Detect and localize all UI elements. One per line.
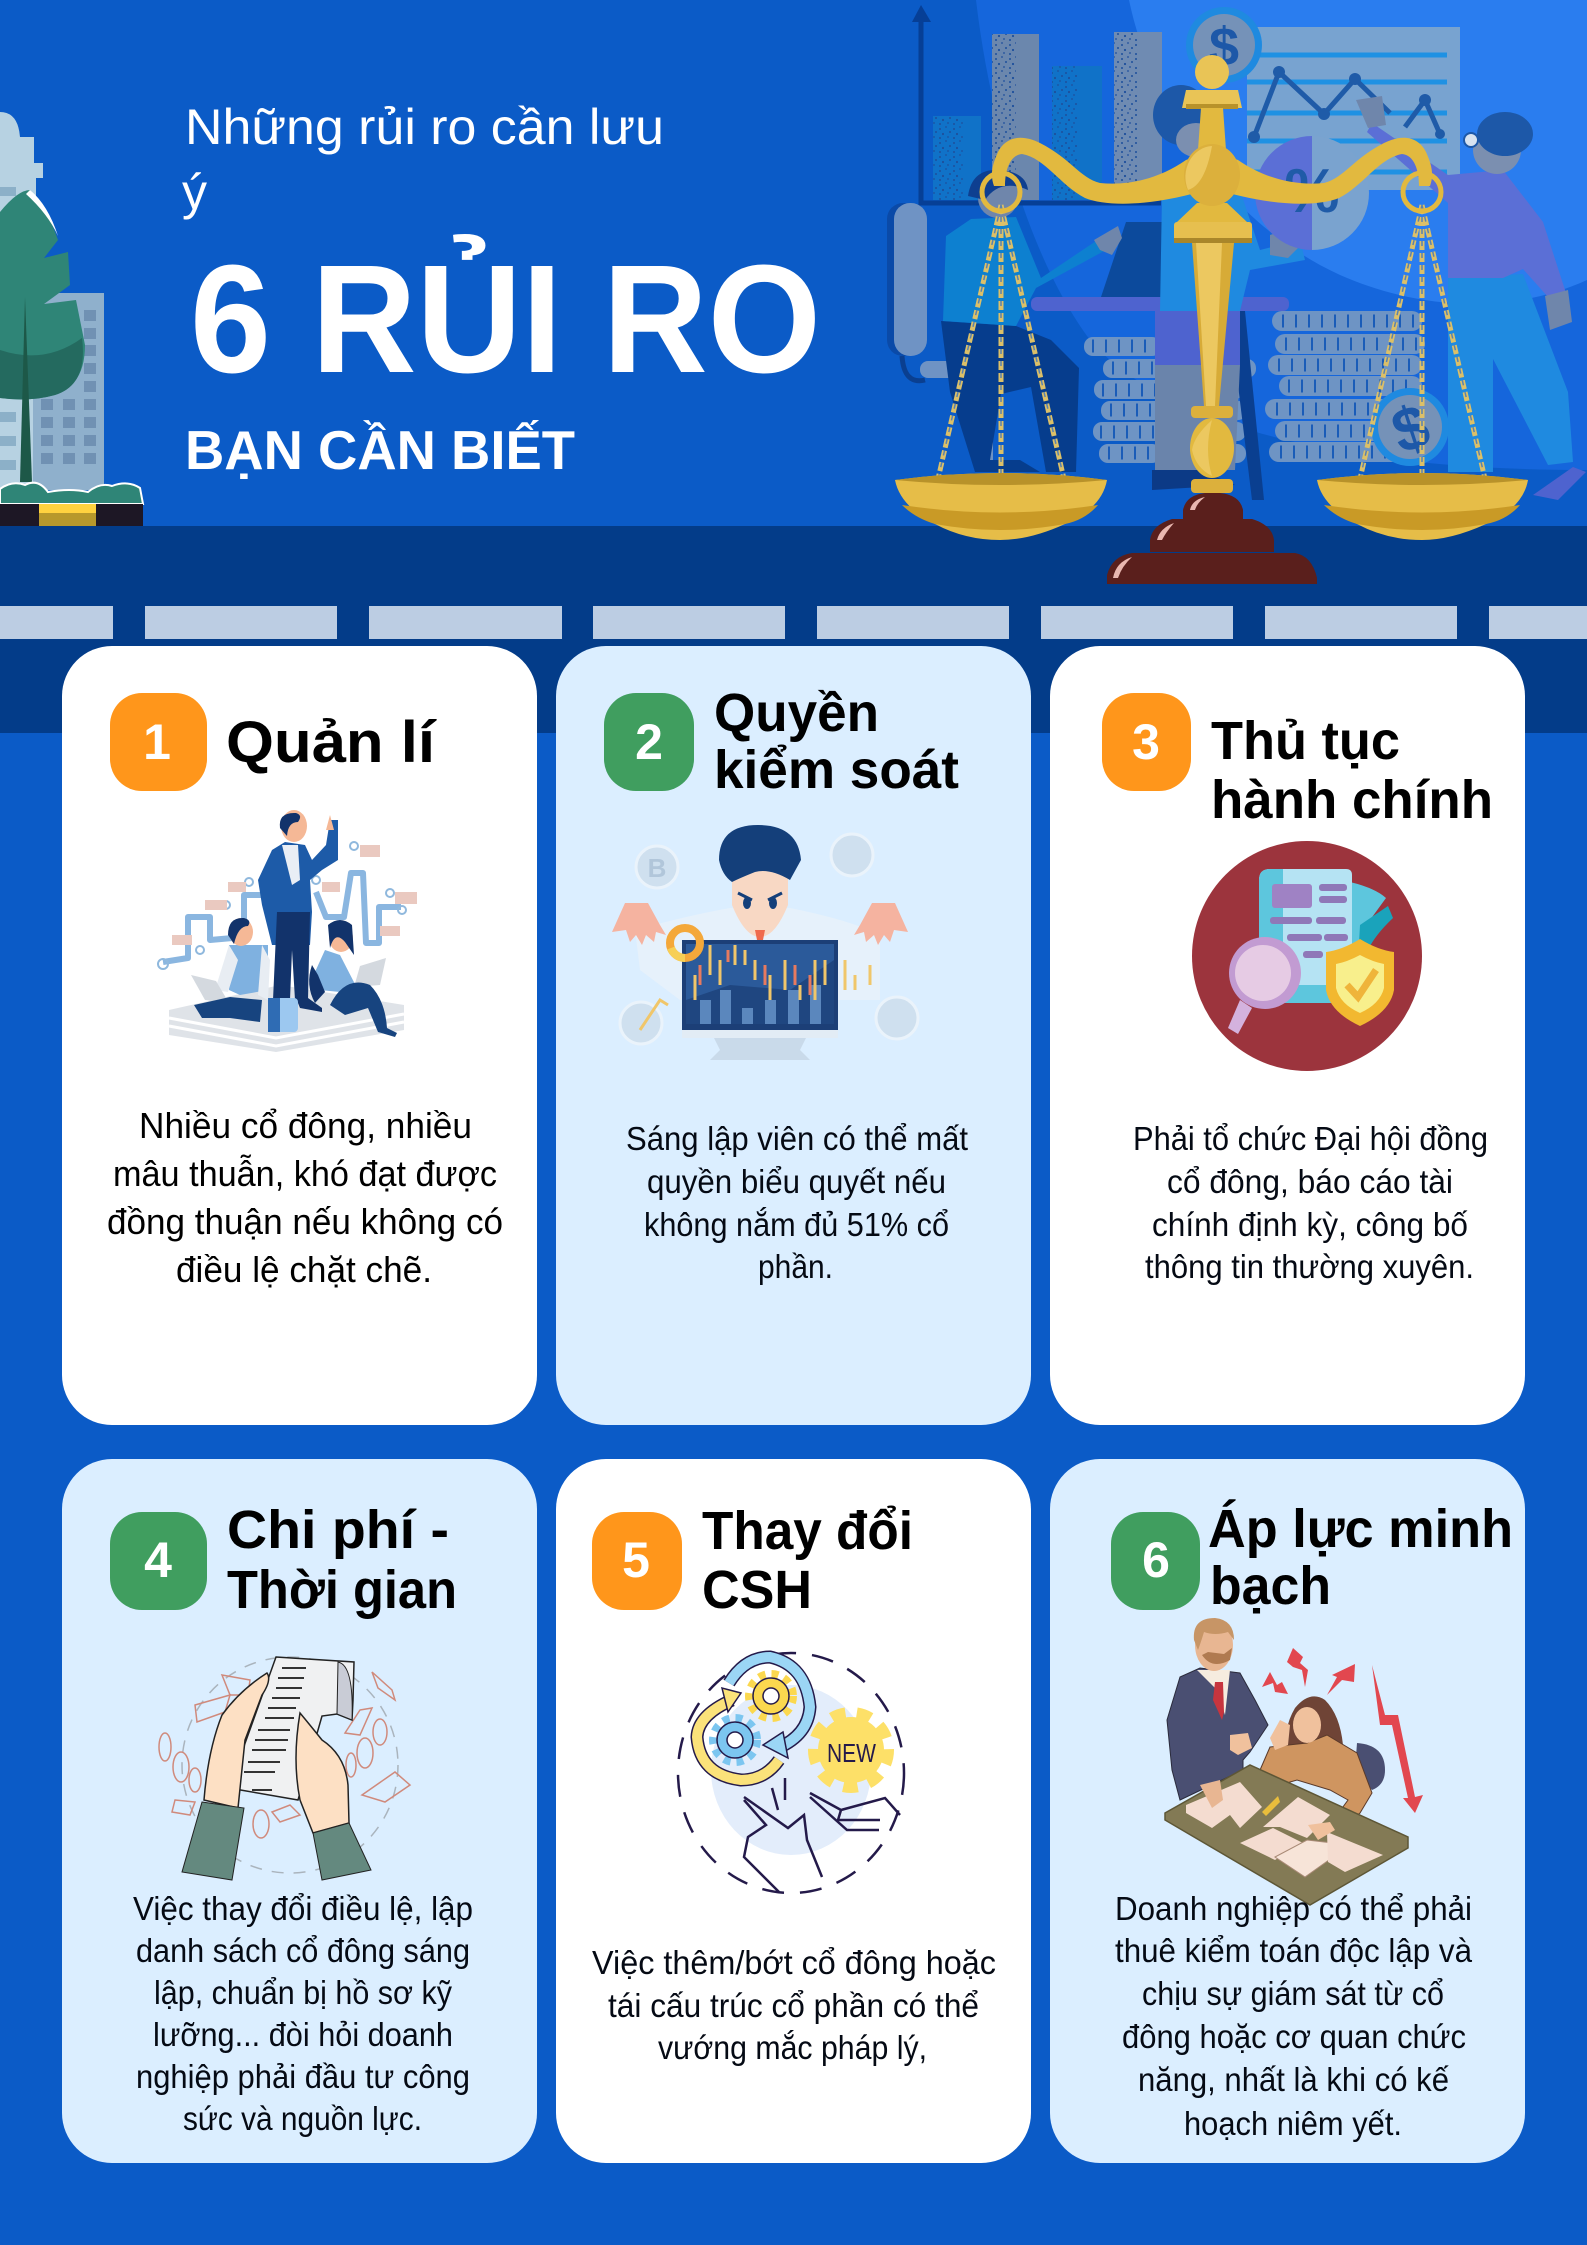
body text 1: Nhiều cổ đông, nhiều (139, 1105, 472, 1146)
badge 1 (110, 693, 207, 791)
illustration: golden balance scale (895, 55, 1528, 584)
title kicker: Những rủi ro cần lưu (185, 99, 664, 155)
body text 4: Việc thay đổi điều lệ, lập (133, 1890, 473, 1927)
heading 4 (227, 1500, 457, 1620)
body text 4: lưỡng... đòi hỏi doanh (153, 2016, 453, 2053)
body text 6: Doanh nghiệp có thể phải (1115, 1890, 1472, 1927)
body text 2 (626, 1120, 968, 1285)
panel: card 1 Quản lí (62, 646, 537, 1425)
body text 1 (107, 1105, 503, 1290)
road band (0, 526, 1587, 733)
illustration: stressed employee and boss (1165, 1618, 1423, 1905)
heading 4: Chi phí - (227, 1500, 449, 1560)
badge 5 (592, 1512, 682, 1610)
panel: card 6 Áp lực minh bạch (1050, 1459, 1525, 2163)
heading 1: Quản lí (226, 710, 437, 775)
header illustration: business team with charts: $ (1384, 391, 1438, 468)
panel: card 5 Thay đổi CSH (556, 1459, 1031, 2163)
badge 3 (1102, 693, 1191, 791)
body text 5: tái cấu trúc cổ phần có thể (608, 1987, 979, 2024)
heading 3: Thủ tục (1211, 711, 1400, 771)
body text 4: danh sách cổ đông sáng (136, 1932, 470, 1969)
illustration: trader with chart: B (648, 853, 666, 883)
body text 4: lập, chuẩn bị hồ sơ kỹ (154, 1974, 452, 2011)
badge 4 (110, 1512, 207, 1610)
badge 2: 2 (635, 714, 663, 770)
badge 1: 1 (143, 714, 171, 770)
body text 3: thông tin thường xuyên. (1145, 1248, 1474, 1285)
panel: card 2 Quyền kiểm soát (556, 646, 1031, 1425)
illustration: management team (158, 810, 417, 1052)
panel: card 4 Chi phí - Thời gian (62, 1459, 537, 2163)
heading 6: bạch (1210, 1556, 1331, 1616)
body text 2: Sáng lập viên có thể mất (626, 1120, 968, 1157)
badge 4: 4 (144, 1532, 172, 1588)
body text 1: đồng thuận nếu không có (107, 1201, 503, 1242)
heading 3 (1211, 711, 1493, 830)
heading 3: hành chính (1211, 770, 1493, 830)
body text 6 (1115, 1890, 1473, 2142)
header illustration: business team with charts: $ (1209, 17, 1239, 77)
body text 6: đông hoặc cơ quan chức (1122, 2018, 1466, 2055)
header illustration: business team with charts (887, 0, 1587, 500)
body text 4: nghiệp phải đầu tư công (136, 2058, 470, 2095)
main heading: 6 RỦI RO (190, 233, 821, 405)
body text 3 (1133, 1120, 1488, 1285)
badge 3: 3 (1132, 714, 1160, 770)
heading 2: Quyền (714, 683, 879, 743)
body text 5 (592, 1944, 996, 2066)
panel: card 3 Thủ tục hành chính (1050, 646, 1525, 1425)
heading 6 (1208, 1499, 1513, 1616)
title kicker (182, 99, 664, 220)
illustration: changing gears: NEW (827, 1738, 876, 1768)
heading 5: Thay đổi (702, 1501, 913, 1561)
illustration: hands holding receipt (159, 1657, 410, 1880)
page title block (182, 99, 821, 481)
body text 6: hoạch niêm yết. (1184, 2105, 1402, 2142)
body text 3: chính định kỳ, công bố (1152, 1206, 1468, 1243)
badge 6 (1111, 1512, 1200, 1610)
badge 5: 5 (622, 1532, 650, 1588)
body text 6: chịu sự giám sát từ cổ (1142, 1975, 1444, 2012)
header illustration: business team with charts: % (1284, 157, 1340, 226)
body text 2: quyền biểu quyết nếu (647, 1163, 946, 1200)
heading 4: Thời gian (227, 1560, 457, 1620)
title kicker: ý (182, 164, 207, 220)
illustration: trader with chart (612, 825, 918, 1060)
body text 3: cổ đông, báo cáo tài (1167, 1163, 1453, 1200)
heading 2 (714, 683, 959, 800)
body text 5: vướng mắc pháp lý, (658, 2029, 927, 2066)
body text 3: Phải tổ chức Đại hội đồng (1133, 1120, 1488, 1157)
body text 6: năng, nhất là khi có kế (1138, 2061, 1449, 2098)
heading 6: Áp lực minh (1208, 1499, 1513, 1559)
body text 4 (133, 1890, 473, 2137)
heading 5 (702, 1501, 913, 1620)
heading 2: kiểm soát (714, 740, 959, 800)
illustration: document with magnifier and shield (1192, 841, 1422, 1071)
sub heading: BẠN CẦN BIẾT (185, 419, 575, 481)
body text 2: không nắm đủ 51% cổ (644, 1206, 949, 1243)
body text 2: phần. (758, 1248, 833, 1285)
illustration: buildings and tree (0, 112, 143, 529)
body text 4: sức và nguồn lực. (183, 2100, 422, 2137)
body text 1: điều lệ chặt chẽ. (176, 1249, 432, 1290)
illustration: changing gears (678, 1653, 904, 1893)
badge 6: 6 (1142, 1532, 1170, 1588)
body text 6: thuê kiểm toán độc lập và (1115, 1932, 1473, 1969)
body text 1: mâu thuẫn, khó đạt được (113, 1153, 497, 1194)
body text 5: Việc thêm/bớt cổ đông hoặc (592, 1944, 996, 1981)
badge 2 (604, 693, 694, 791)
heading 5: CSH (702, 1560, 812, 1620)
